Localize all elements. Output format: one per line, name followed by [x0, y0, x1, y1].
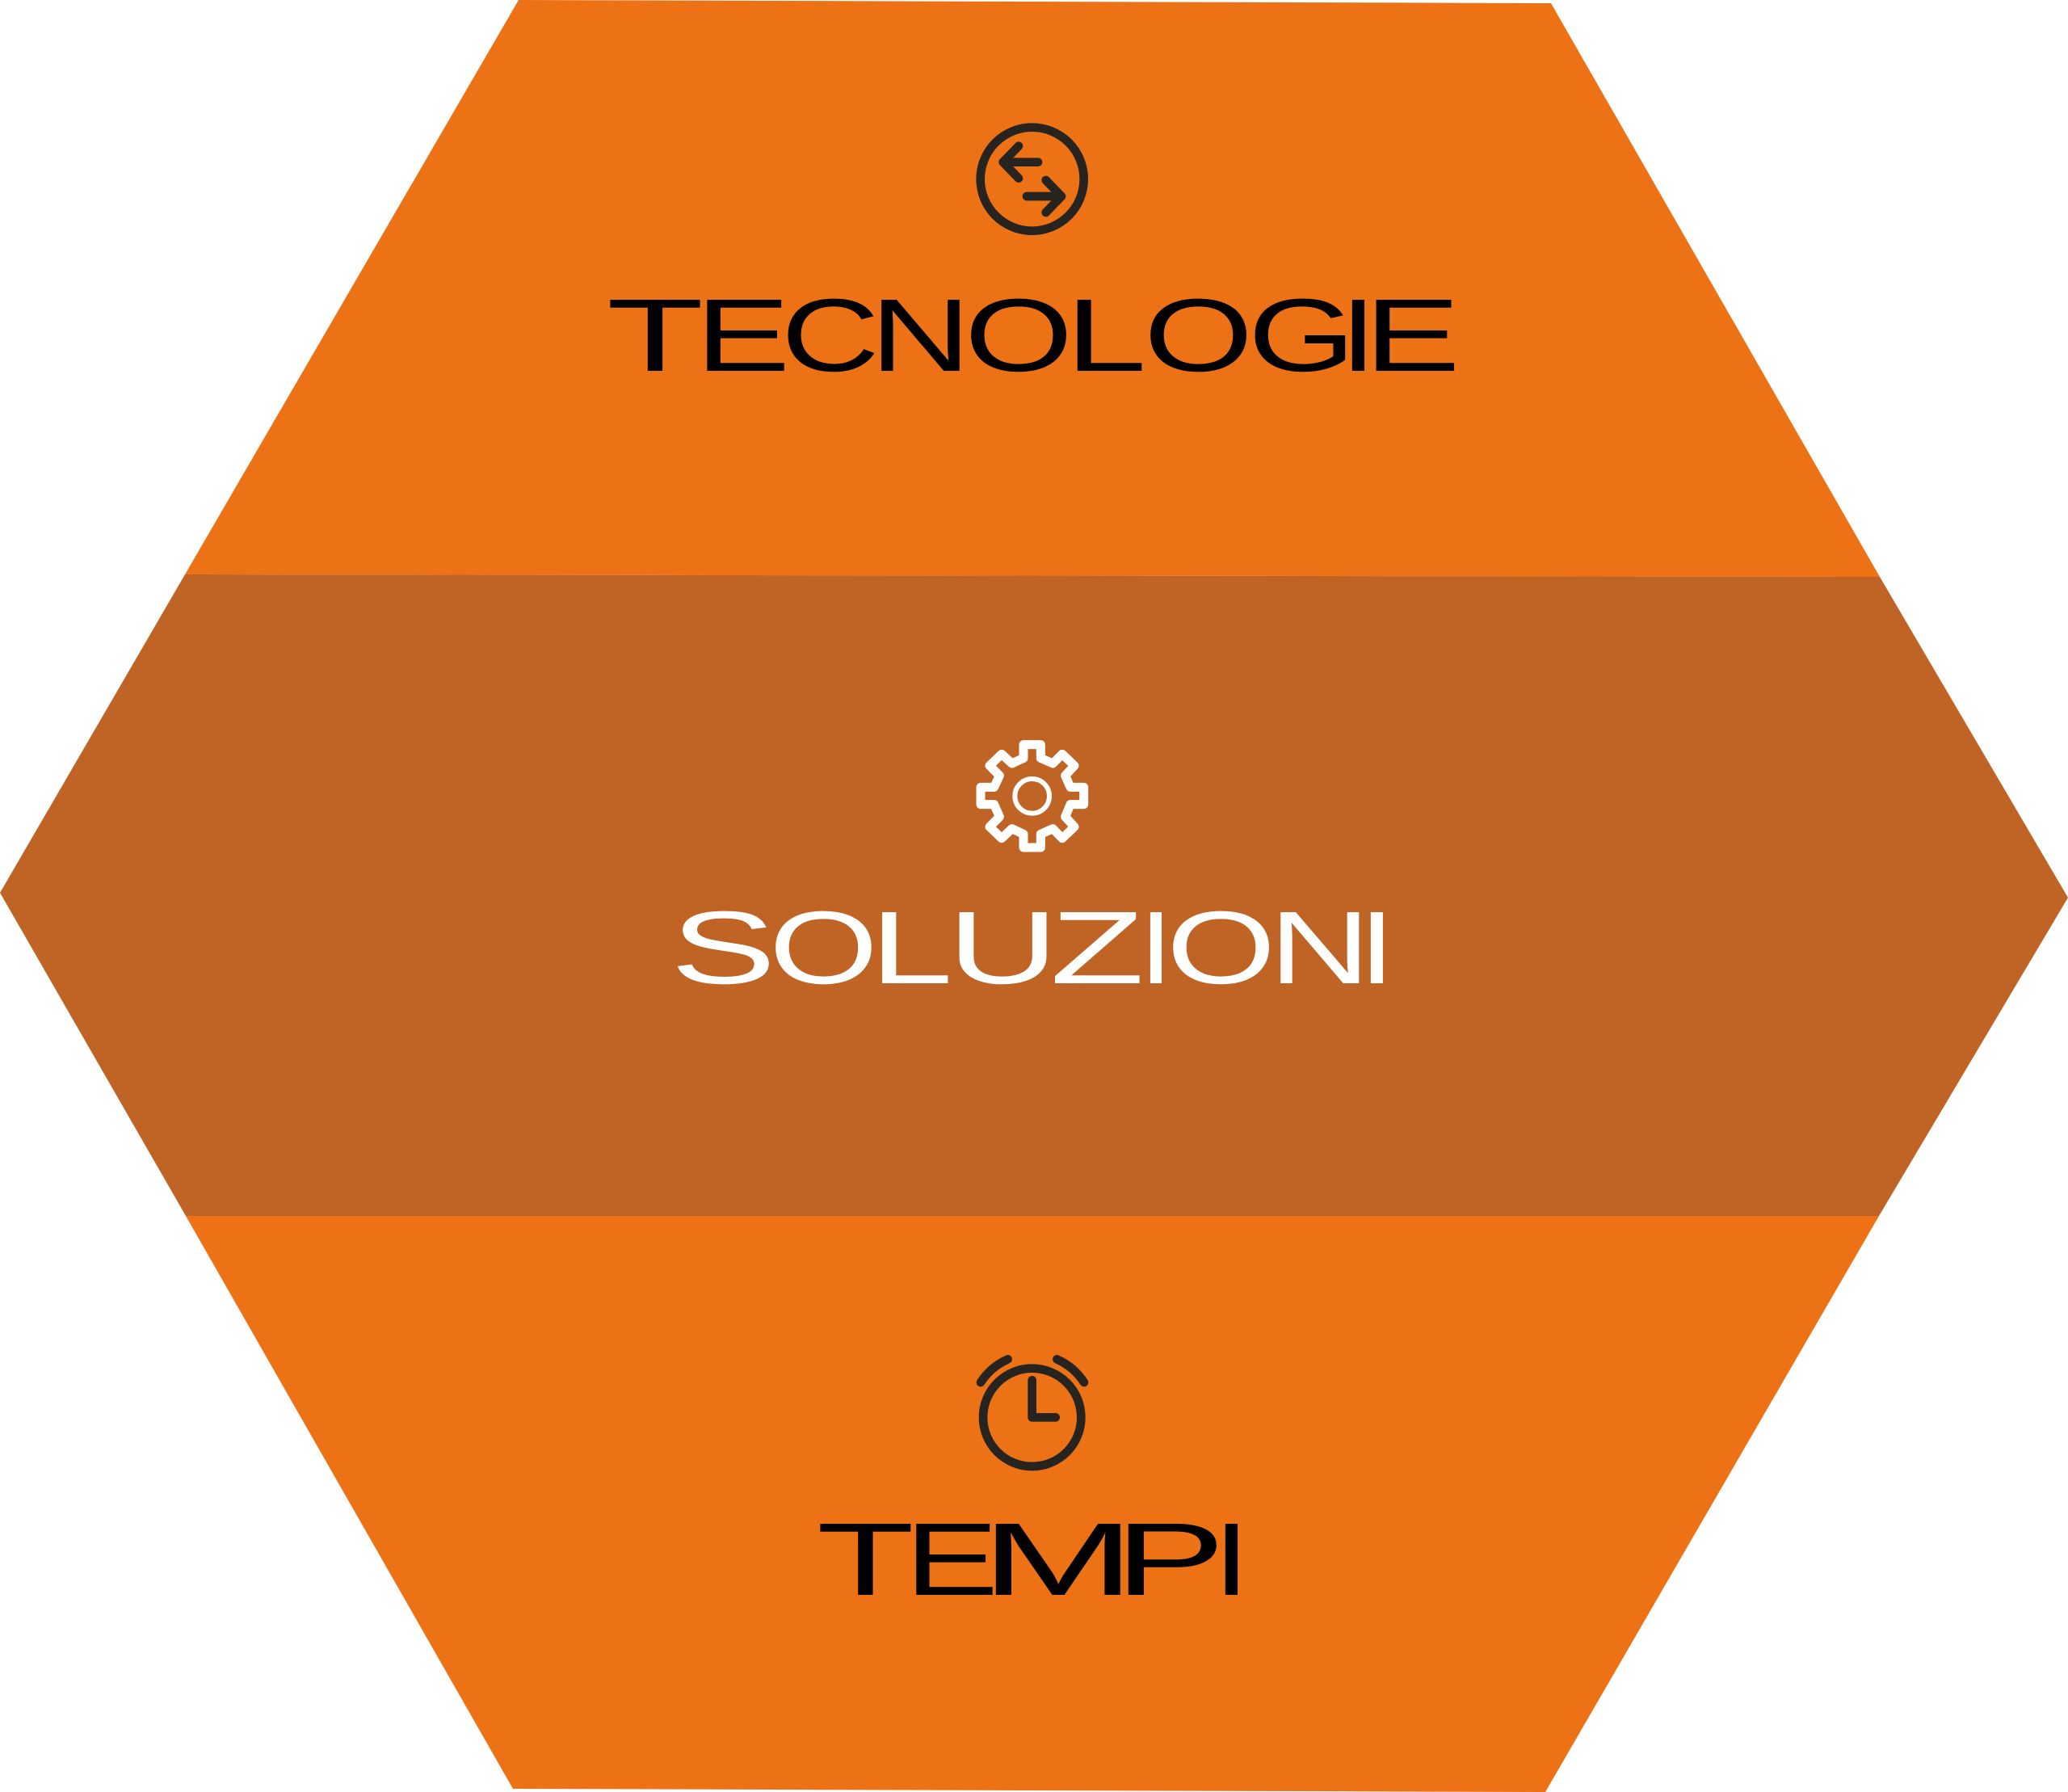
heading: TECNOLOGIE — [607, 278, 1461, 393]
panel: tecnologie — [185, 0, 1880, 577]
heading: TEMPI: P — [1115, 1502, 1225, 1617]
heading: SOLUZIONI: I — [1359, 890, 1395, 1006]
panel: tempi — [186, 1216, 1879, 1792]
heading: TEMPI: I — [1213, 1502, 1250, 1617]
heading: TECNOLOGIE: O — [965, 278, 1073, 393]
heading: SOLUZIONI — [670, 890, 1395, 1006]
heading: SOLUZIONI: L — [870, 890, 952, 1006]
heading: SOLUZIONI: S — [670, 890, 776, 1006]
heading: TEMPI: T — [817, 1502, 914, 1617]
heading: TECNOLOGIE: N — [870, 278, 971, 393]
heading: TECNOLOGIE: I — [1340, 278, 1377, 393]
heading: TECNOLOGIE: C — [781, 278, 879, 393]
heading: SOLUZIONI: U — [948, 890, 1058, 1006]
panel: soluzioni — [0, 574, 2068, 1216]
heading: TEMPI: E — [905, 1502, 999, 1617]
heading: SOLUZIONI: O — [1166, 890, 1276, 1006]
heading: TECNOLOGIE: T — [607, 278, 704, 393]
heading: TECNOLOGIE: E — [696, 278, 790, 393]
heading: SOLUZIONI: N — [1269, 890, 1370, 1006]
heading: TECNOLOGIE: O — [1144, 278, 1253, 393]
heading: TEMPI: M — [981, 1502, 1135, 1617]
heading: SOLUZIONI: I — [1139, 890, 1173, 1006]
icon: gear — [981, 745, 1084, 848]
heading: TECNOLOGIE: G — [1248, 278, 1356, 393]
icon: exchange arrows in circle — [981, 128, 1084, 231]
heading: TECNOLOGIE: L — [1066, 278, 1146, 393]
heading: SOLUZIONI: Z — [1050, 890, 1144, 1006]
heading: SOLUZIONI: O — [769, 890, 878, 1006]
heading: TEMPI — [817, 1502, 1250, 1617]
heading: TECNOLOGIE: E — [1364, 278, 1461, 393]
icon: alarm clock — [981, 1359, 1084, 1466]
